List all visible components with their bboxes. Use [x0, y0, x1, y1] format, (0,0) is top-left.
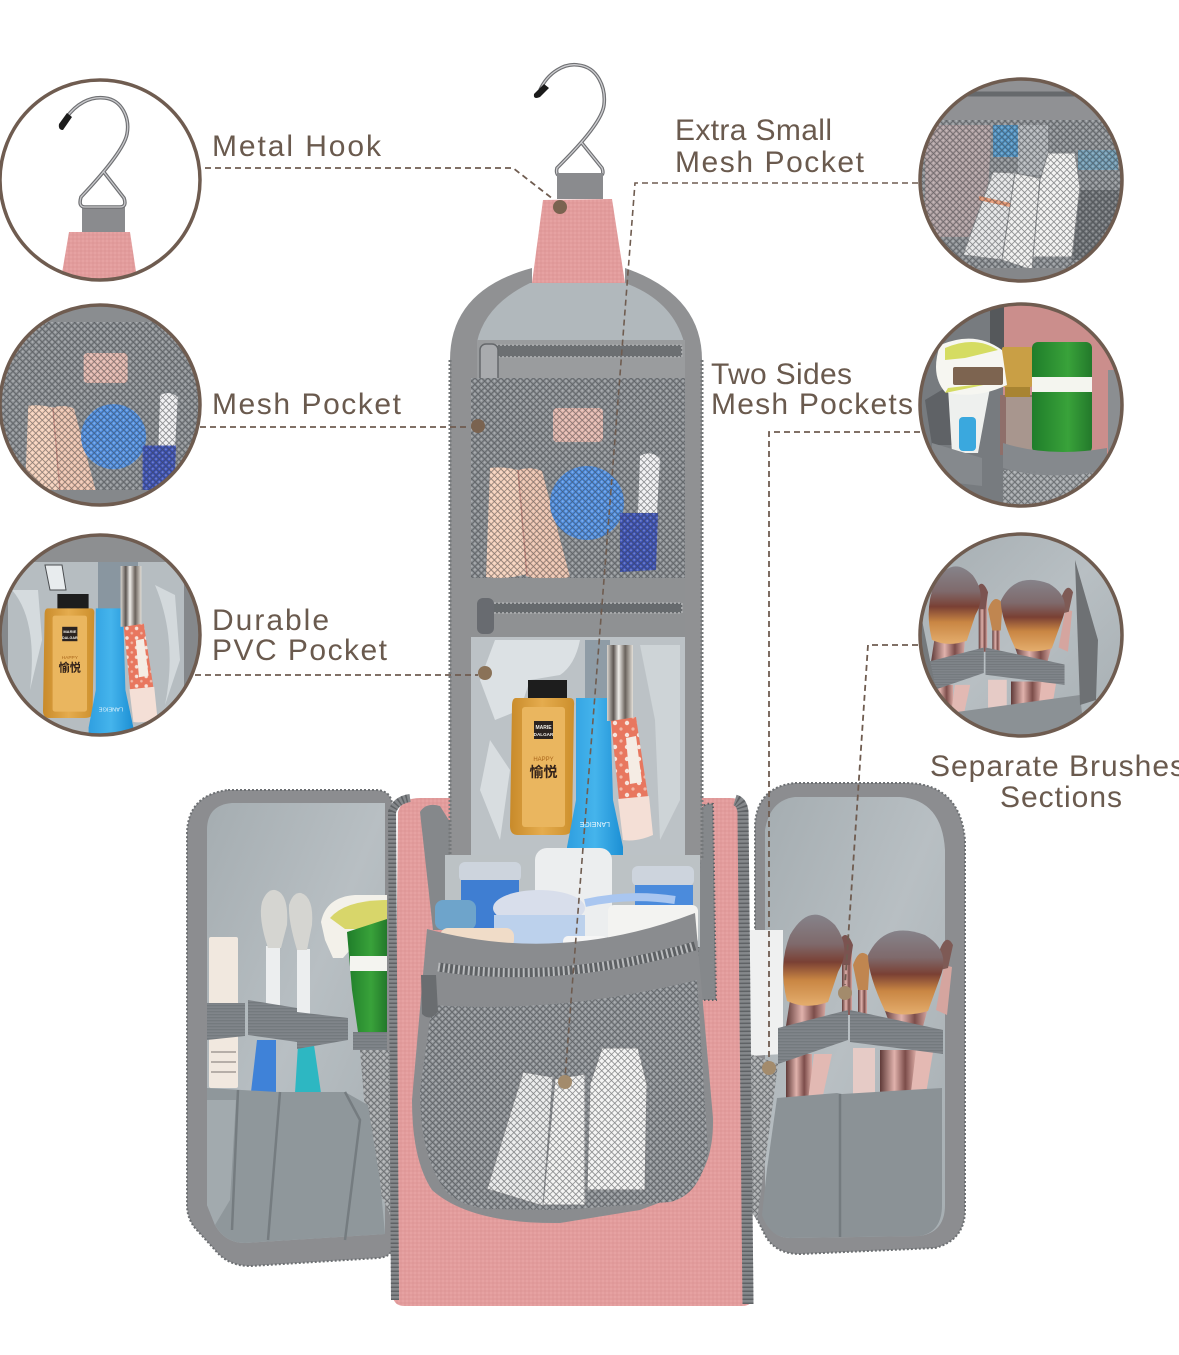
label: mesh pocket: Mesh Pocket: [212, 388, 402, 421]
callout: durable PVC pocket: PVC Pocket: [212, 634, 388, 667]
callout: separate brushes sections: [920, 534, 1179, 814]
inset circle: PVC pocket: [0, 535, 204, 736]
callout: separate brushes sections: Sections: [1000, 781, 1122, 814]
metal hook: [534, 65, 604, 176]
product: hook and hanging tab: [532, 65, 625, 283]
leader line: two sides mesh pockets: [762, 432, 920, 1075]
callout: metal hook: [0, 80, 382, 285]
product: bag interior items: [435, 848, 700, 950]
side mesh pocket: [750, 1054, 778, 1220]
inset circle: metal hook: [0, 80, 200, 285]
label: separate brushes sections: Separate Brushes: [930, 750, 1179, 783]
product: hanging flap with pockets: [450, 268, 702, 862]
upper zipper: [477, 340, 685, 394]
inset circle: side mesh pockets: [920, 300, 1123, 510]
white bottle: [747, 930, 783, 1056]
product: front mesh pocket: [412, 913, 713, 1223]
product: bag main body: [392, 798, 752, 1306]
green tube: [347, 919, 387, 1032]
lower zipper: [470, 578, 685, 640]
brush pockets: [762, 1088, 942, 1238]
brush pockets: [207, 1088, 385, 1243]
leader line: PVC pocket: [195, 666, 492, 680]
cream stick: [209, 937, 238, 1088]
inset circle: extra small mesh pocket: [915, 75, 1130, 286]
label: durable PVC pocket: Durable: [212, 604, 329, 637]
product: right organizer panel: [747, 783, 965, 1254]
toothbrush: blue: [251, 890, 287, 1092]
callout: extra small mesh pocket: [675, 75, 1130, 286]
silver lining: [477, 283, 684, 342]
callout: two sides mesh pockets: Mesh Pockets: [711, 388, 913, 421]
leader line: mesh pocket: [200, 419, 485, 433]
side mesh pocket: [360, 1050, 390, 1215]
pink tab: [532, 199, 625, 283]
callout: extra small mesh pocket: Mesh Pocket: [675, 146, 865, 179]
razor: [321, 895, 387, 958]
label: metal hook: Metal Hook: [212, 130, 382, 163]
PVC pocket: [471, 637, 685, 862]
toothbrush: teal: [289, 893, 321, 1093]
pocket zipper: [421, 946, 695, 1018]
makeup brushes: [778, 915, 953, 1100]
gray strap: [557, 173, 603, 199]
leader line: metal hook: [205, 168, 567, 214]
inset circle: mesh pocket: [0, 300, 200, 512]
pocket mesh with travel bottles: [420, 980, 708, 1210]
callout: mesh pocket: [0, 300, 402, 512]
label: extra small mesh pocket: Extra Small: [675, 114, 832, 147]
leader line: extra small mesh pocket: [558, 183, 918, 1089]
product: left organizer panel: [187, 790, 392, 1266]
elastic bands: [207, 1000, 387, 1050]
callout: durable PVC pocket: [0, 535, 388, 736]
callout: two sides mesh pockets: [711, 300, 1123, 510]
leader line: separate brushes: [838, 645, 918, 1000]
label: two sides mesh pockets: Two Sides: [711, 358, 852, 391]
inset circle: brush sections: [920, 534, 1122, 740]
mesh pocket: [471, 378, 685, 582]
